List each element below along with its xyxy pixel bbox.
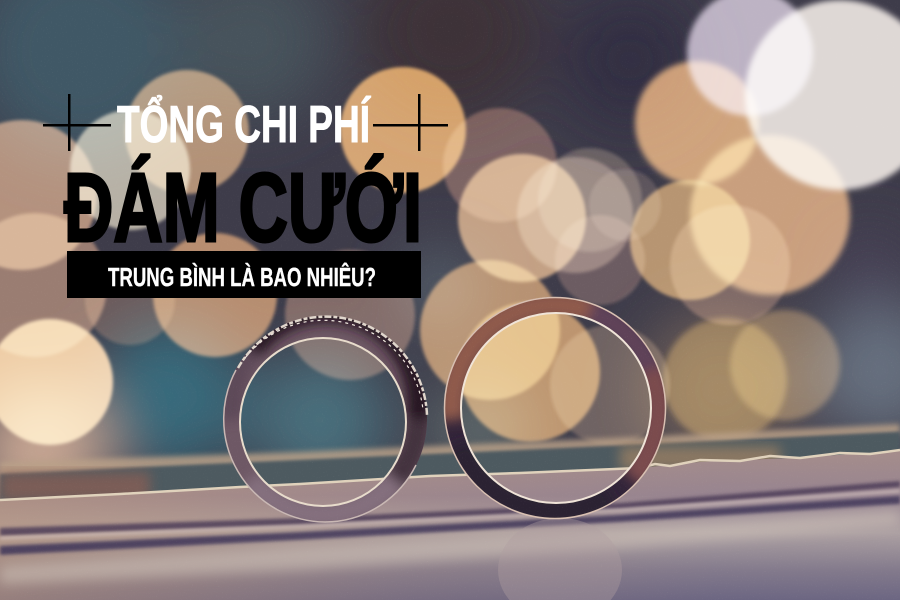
right crosshair ornament bbox=[373, 94, 448, 151]
subtitle banner: TRUNG BÌNH LÀ BAO NHIÊU? bbox=[108, 262, 376, 292]
bokeh light circles bbox=[0, 0, 900, 445]
window sill bbox=[0, 424, 900, 600]
heading line: Đám cưới: ĐÁM CƯỚI bbox=[64, 153, 422, 262]
heading line: Tổng chi phí: TỔNG CHI PHÍ bbox=[117, 95, 371, 154]
left diamond ring bbox=[222, 315, 428, 523]
subtitle banner bbox=[67, 251, 421, 298]
right plain ring bbox=[443, 296, 667, 520]
left crosshair ornament bbox=[43, 94, 111, 151]
